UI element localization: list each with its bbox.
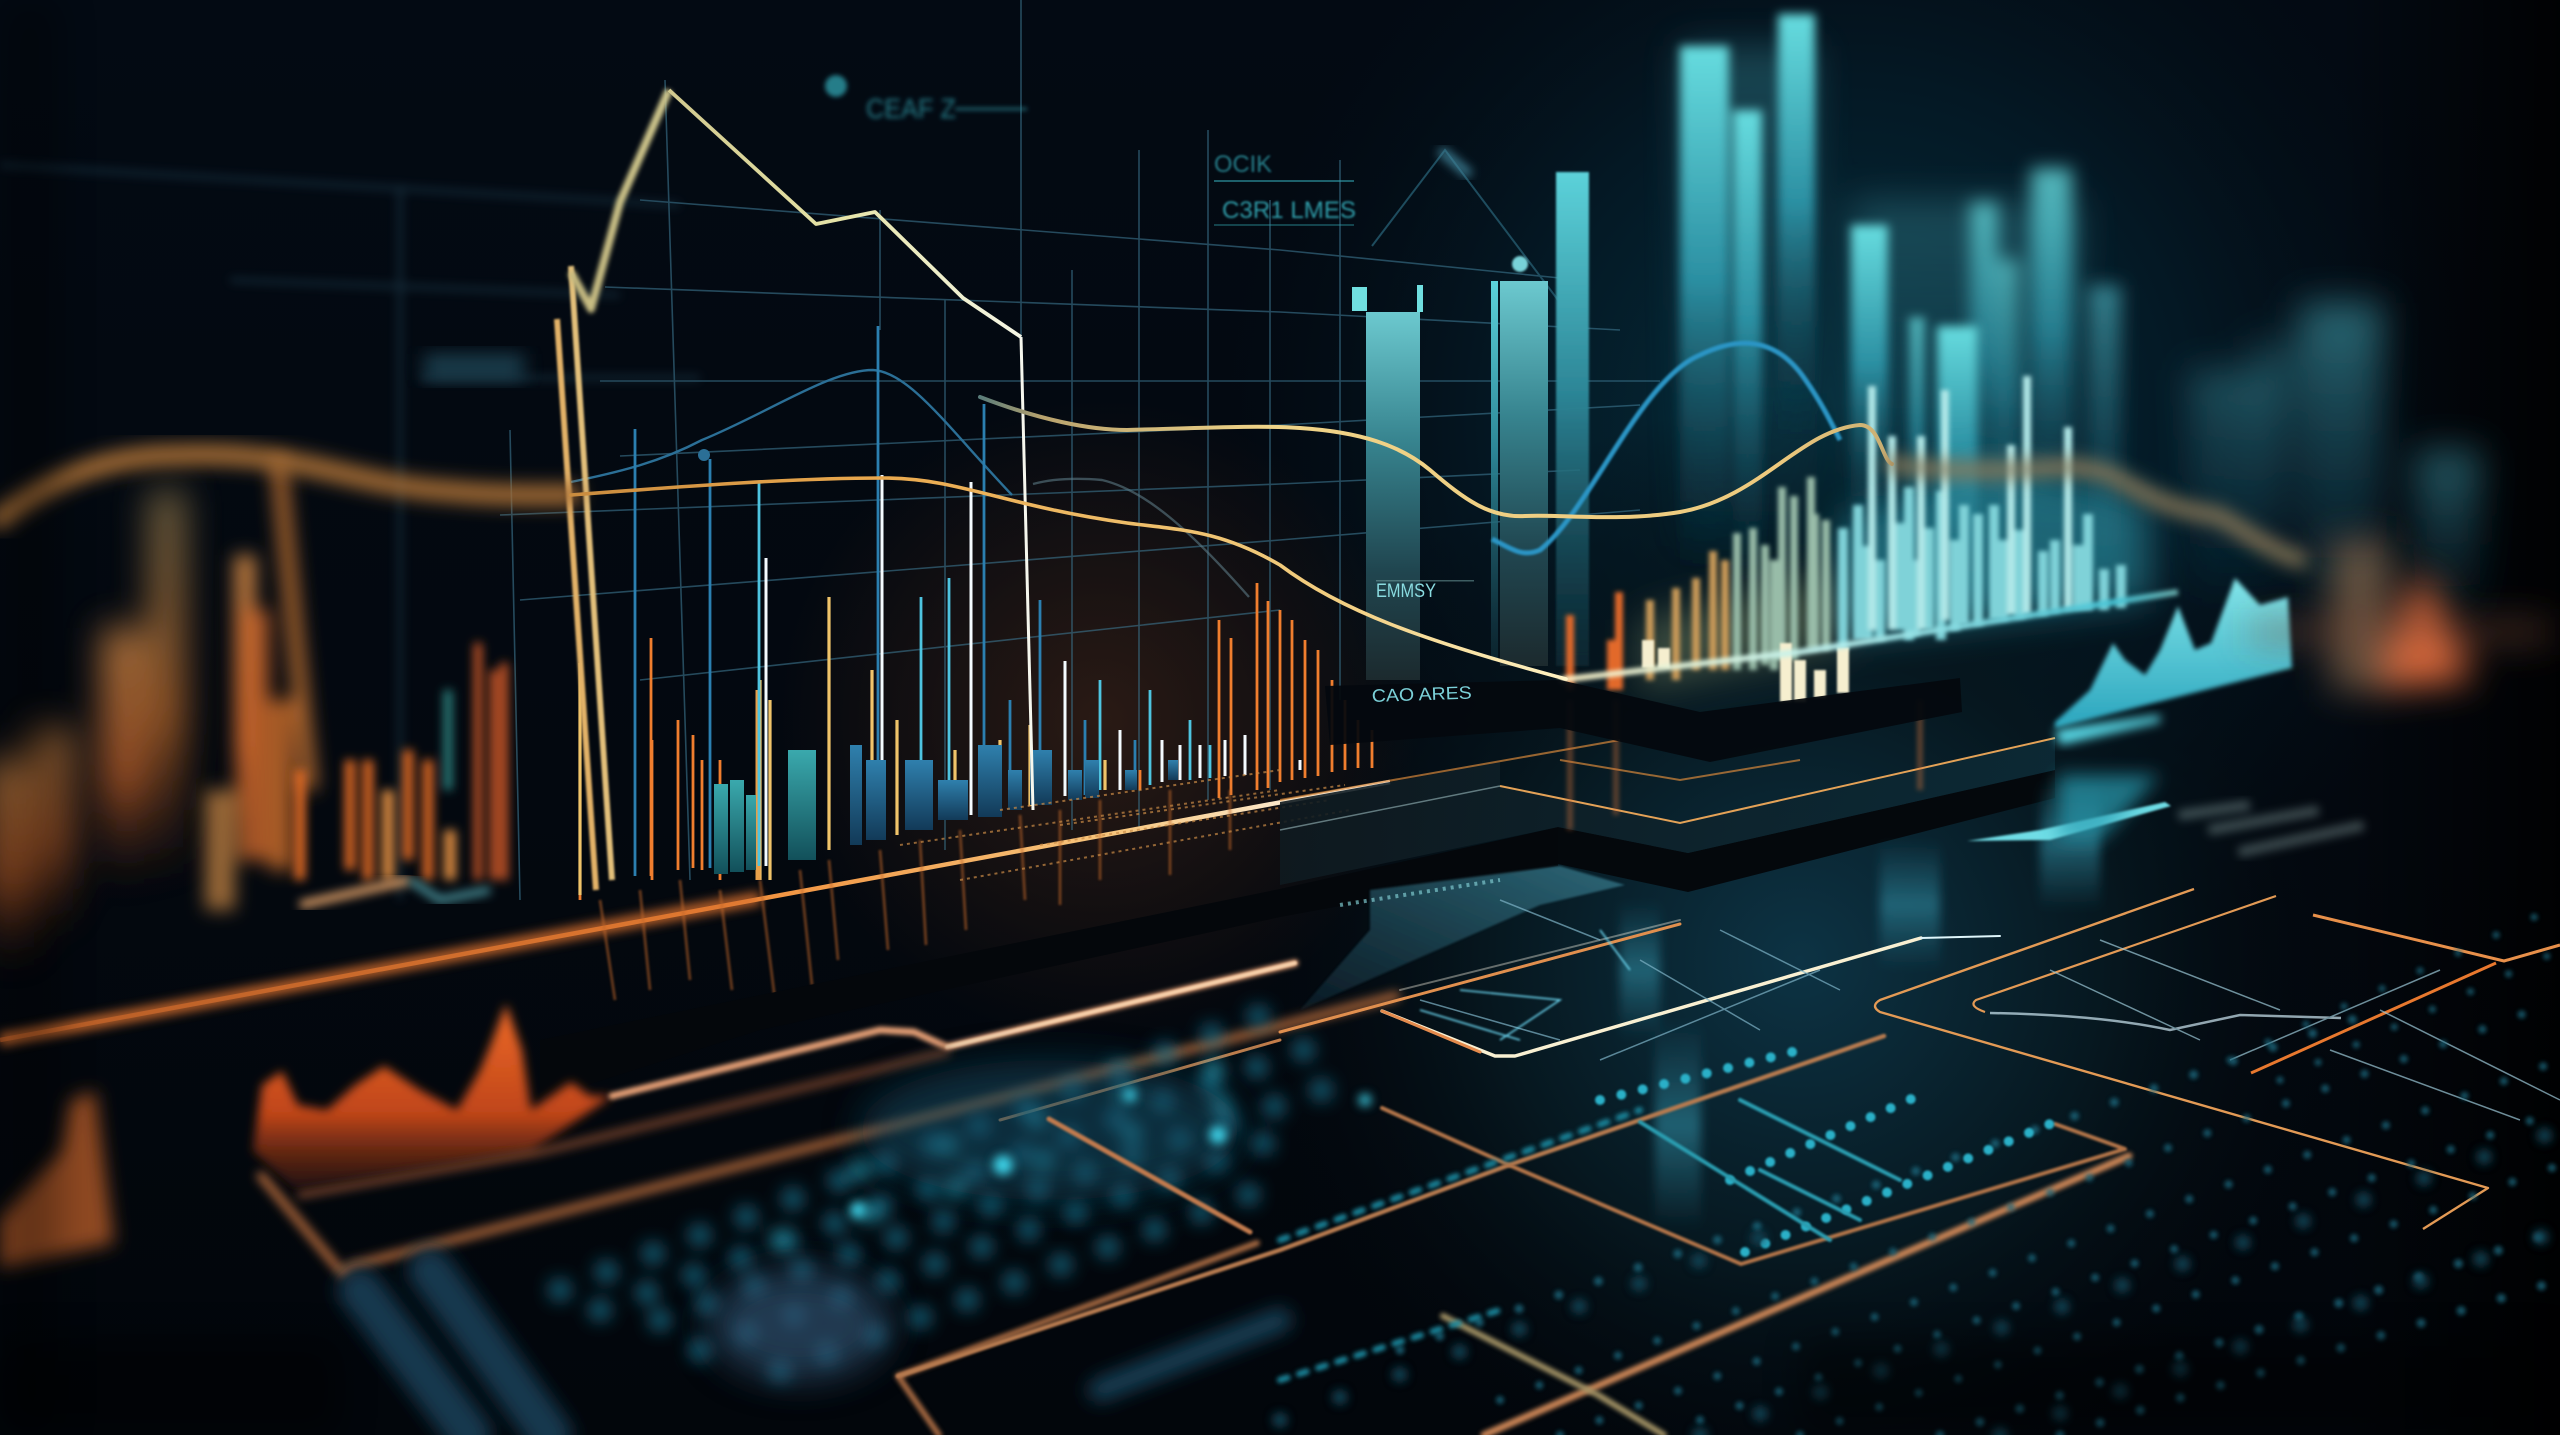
platform floor line and reflections [0, 592, 2178, 1040]
bright rounded panel outline [1280, 920, 2000, 1056]
chart grid [0, 0, 1660, 900]
floating label: centre [1376, 580, 1474, 602]
fine bar chart: orange and gold spikes [580, 326, 1372, 900]
bright base bars [1648, 640, 1843, 702]
thin orange outlines right [1875, 889, 2560, 1229]
dim label left [424, 354, 524, 380]
right cyan area chart [2055, 578, 2292, 728]
orange mid-blur bars [300, 643, 504, 880]
orange blurred bars left [0, 490, 184, 960]
orange area chart foreground [253, 1004, 612, 1188]
floating label: upper right block [1214, 151, 1356, 226]
glowing circuit sparks [1420, 930, 1630, 1040]
curve: teal line [1492, 343, 1840, 553]
sharp cyan column chart [1352, 172, 1589, 680]
fine scratch detail on dark panels [1420, 900, 2560, 1120]
orange soft bars left [205, 457, 310, 910]
floating label: centre: EMMSY [1376, 581, 1436, 602]
scattered blue out-of-focus dots near [360, 1000, 1350, 1435]
far right blurred bars [2190, 303, 2480, 610]
dark upper data block [1325, 678, 1962, 762]
glass slab top surface [1280, 700, 2055, 885]
floor reflections [1620, 780, 2100, 1230]
blue and teal block bars [714, 745, 1178, 874]
blurred text lines on floor [2180, 805, 2365, 852]
cyan light streak [1967, 715, 2171, 841]
orange blob far left [0, 1091, 114, 1268]
blurred cyan bars [1680, 14, 2121, 606]
right orange glow peak [2250, 540, 2550, 690]
floating label: upper right block: OCIK [1214, 151, 1272, 178]
floating label: top legend: CEAF Z [866, 93, 956, 124]
floating label: top legend [825, 75, 1027, 124]
teal surface under slab [1300, 866, 1625, 1010]
floating label: upper right block: C3R1 LMES [1222, 197, 1356, 224]
long gold curve [980, 397, 2300, 560]
foreground orange circuit lines [898, 1036, 2129, 1435]
teal dotted data rows on dark floor [1280, 905, 2560, 1435]
triangle marker [1372, 150, 1558, 300]
blurred grey-blue blob bottom [710, 1060, 1240, 1380]
dark upper data block: CAO ARES [1371, 683, 1472, 706]
soft glow behind right cluster [1640, 460, 2150, 690]
long orange-white curve [0, 455, 1566, 679]
thin blue curves [571, 370, 1249, 597]
main yellow peak line [557, 90, 1033, 890]
dark platform walls [540, 770, 2055, 1100]
small cyan and white bars right cluster [1570, 376, 2121, 690]
orange circuit frame near [261, 963, 1396, 1274]
glowing nodes [850, 1089, 1371, 1218]
